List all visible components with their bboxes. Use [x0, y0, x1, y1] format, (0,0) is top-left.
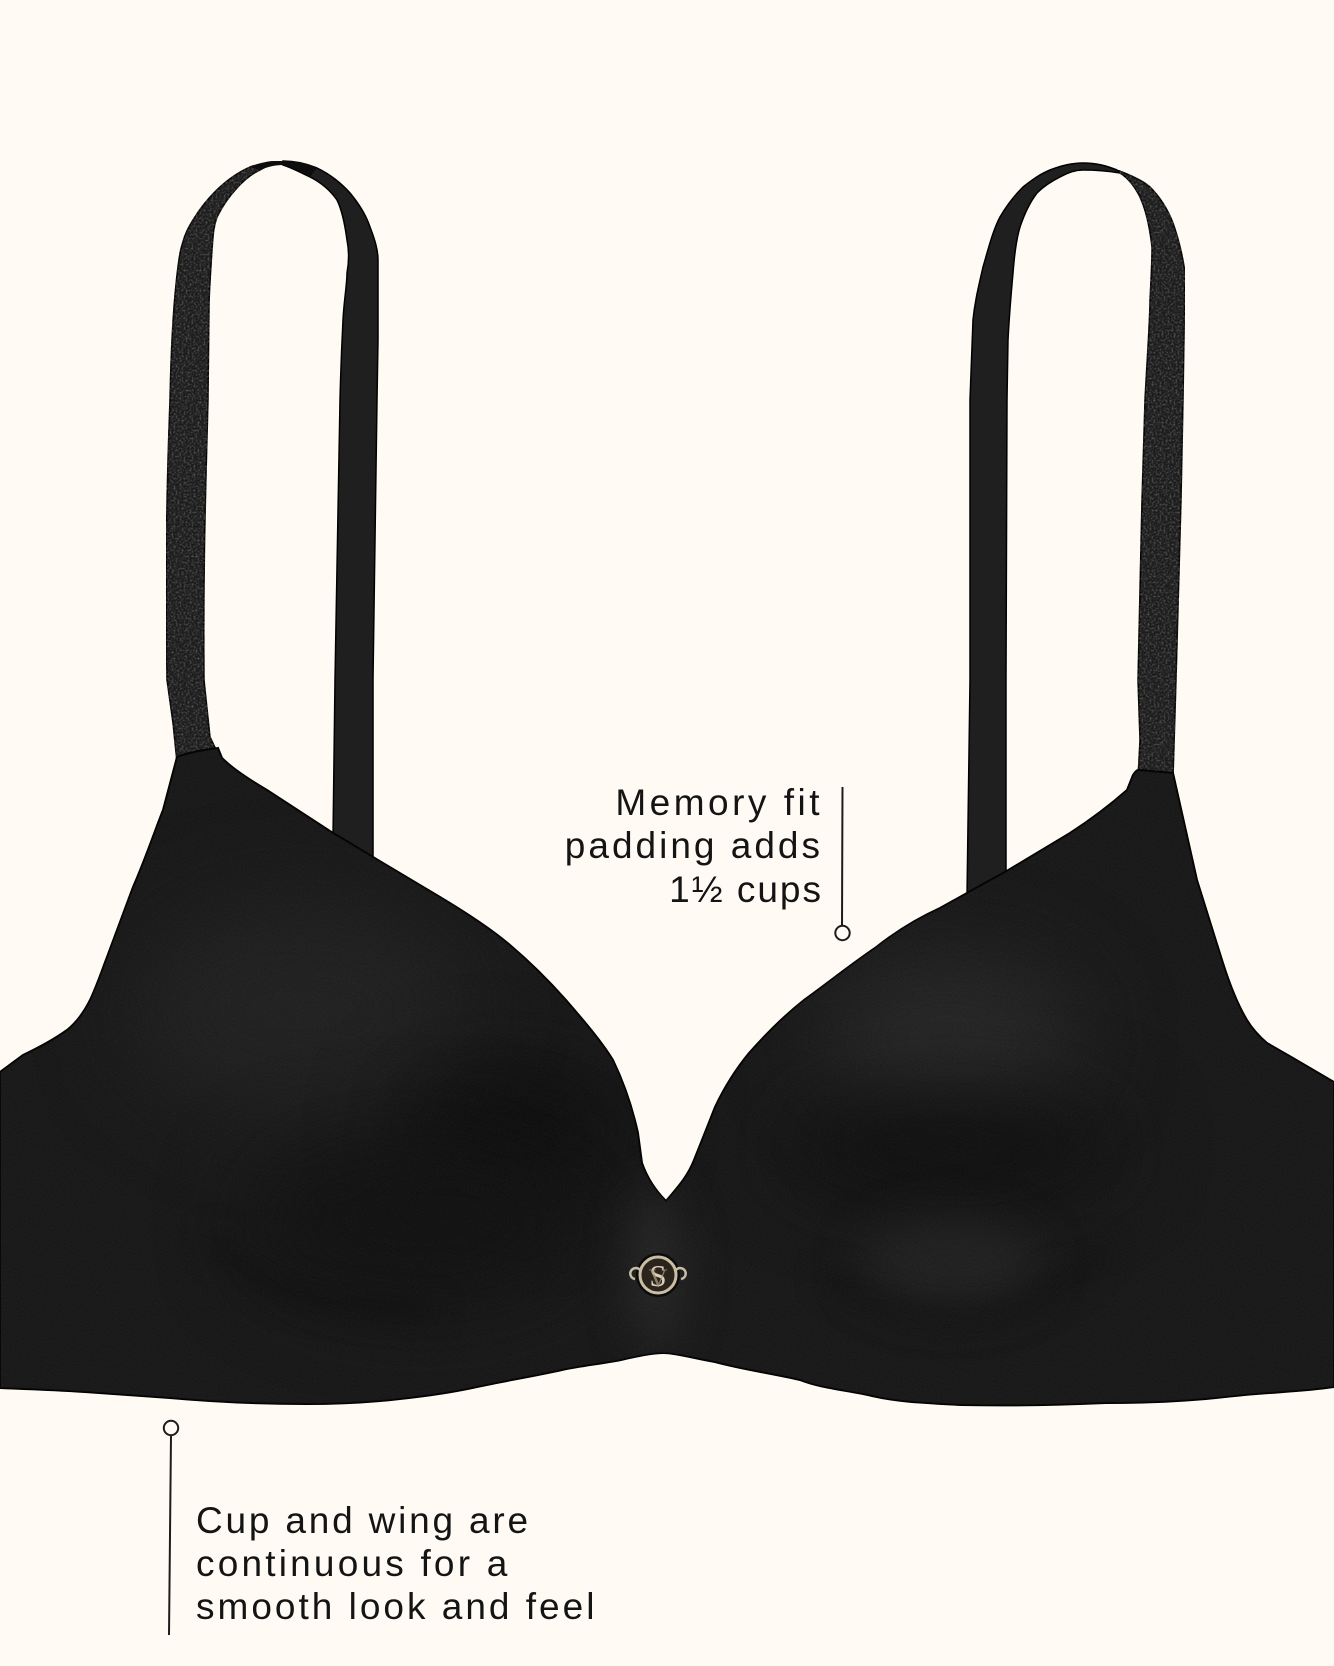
icon: VS logo charm: S: [649, 1258, 667, 1293]
bra product illustration: [0, 161, 1334, 1420]
right strap, glitter back section: [1117, 170, 1185, 778]
callout text: [196, 1500, 597, 1627]
callout text: continuous for a: [196, 1543, 510, 1584]
icon: VS logo charm: V: [649, 1264, 668, 1293]
cups and wings body: [0, 748, 1334, 1405]
icon: VS logo charm: [630, 1253, 686, 1297]
callout leader line and marker: [835, 787, 850, 940]
callout text: Memory fit: [615, 782, 823, 823]
cup shading: [0, 700, 1334, 1420]
callout leader line and marker: [164, 1421, 178, 1635]
callout text: Cup and wing are: [196, 1500, 531, 1541]
callout text: 1½ cups: [669, 869, 823, 910]
left strap, glitter front section: [166, 161, 283, 762]
callout: cup and wing: [164, 1421, 597, 1635]
callout text: smooth look and feel: [196, 1586, 597, 1627]
left strap top crossing: [250, 161, 317, 177]
callout text: [565, 782, 823, 910]
callout: memory fit padding: [565, 782, 850, 940]
fabric grain: [0, 700, 1334, 1420]
callout text: padding adds: [565, 825, 823, 866]
right strap, plain front section: [967, 163, 1120, 897]
left strap, plain back section: [283, 161, 378, 862]
